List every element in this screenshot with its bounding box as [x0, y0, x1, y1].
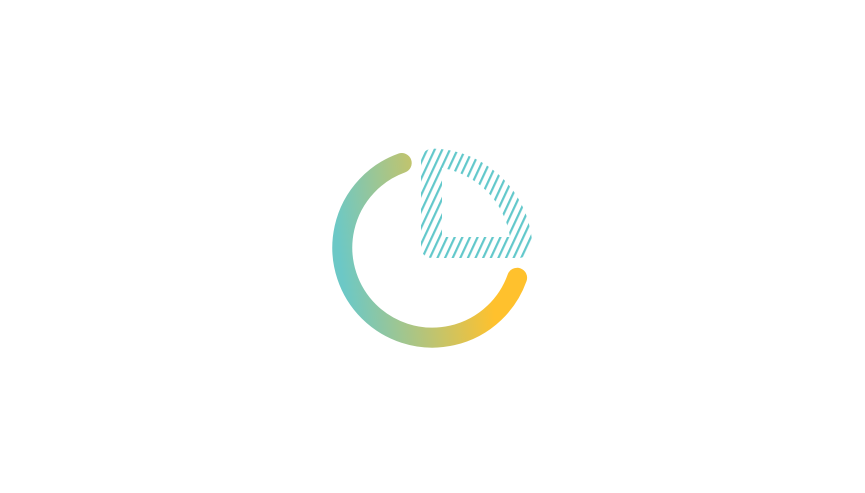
hatched pie sector: [421, 148, 532, 258]
gradient ring: [342, 163, 517, 338]
